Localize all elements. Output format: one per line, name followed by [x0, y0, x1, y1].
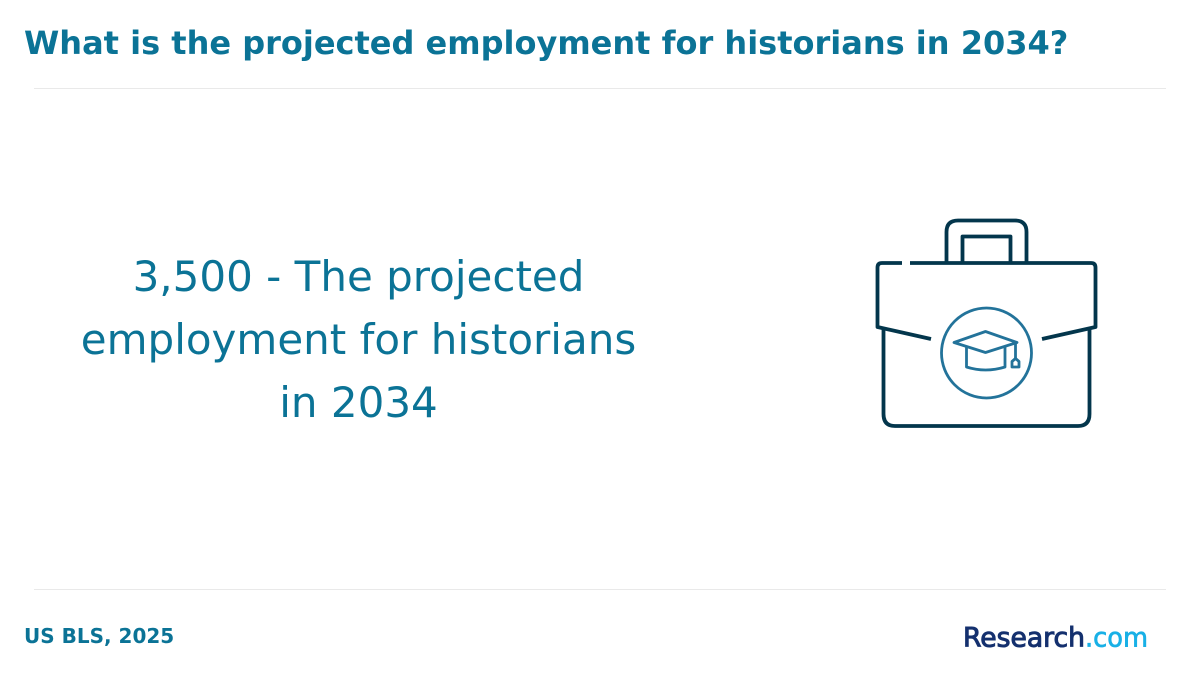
icon: briefcase with graduation cap	[876, 218, 1098, 428]
source label: US BLS, 2025	[24, 624, 174, 648]
logo: Research.com	[963, 622, 1148, 654]
key statistic text	[81, 252, 636, 427]
key statistic text: in 2034	[279, 378, 438, 427]
key statistic text: 3,500 - The projected	[133, 252, 584, 301]
briefcase outline	[878, 220, 1096, 426]
graduation cap badge	[942, 308, 1032, 398]
logo: Research.com: Research	[963, 622, 1085, 654]
title: What is the projected employment for historians in 2034?	[24, 24, 1068, 62]
logo: Research.com: .com	[1085, 622, 1148, 654]
key statistic text: employment for historians	[81, 315, 636, 364]
